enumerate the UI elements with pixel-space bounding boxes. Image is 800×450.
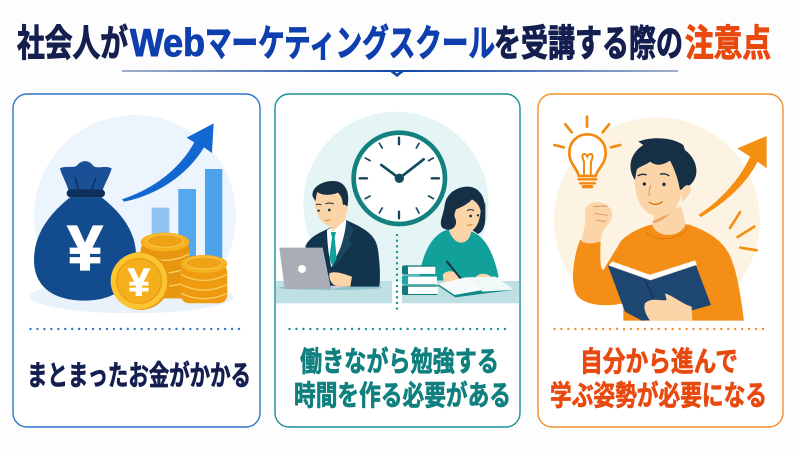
label [294, 345, 511, 411]
title [17, 22, 771, 65]
illustration: money bag, coins and rising chart [30, 115, 236, 317]
dotted divider [554, 328, 764, 330]
title: を受講する際の [494, 23, 683, 64]
label [550, 346, 767, 411]
dotted divider [30, 328, 241, 330]
illustration: clock, worker and student [276, 112, 519, 314]
panel: self-motivation [538, 94, 783, 427]
person: student with notebook [402, 187, 514, 297]
person: learner [573, 138, 744, 321]
title: 注意点 [685, 23, 771, 64]
vertical dotted divider [393, 235, 400, 314]
label: まとまったお金がかかる [27, 359, 251, 391]
label: 働きながら勉強する [300, 345, 499, 377]
clock [354, 133, 445, 224]
yen coin [111, 252, 170, 310]
illustration: learner with book and light bulb [554, 117, 767, 323]
label: 自分から進んで [580, 346, 738, 377]
icon: rising arrow [698, 136, 767, 217]
label: 時間を作る必要がある [294, 379, 511, 411]
dotted divider [290, 328, 505, 330]
icon: light bulb [554, 117, 620, 187]
title underline with chevron [122, 70, 678, 77]
title: マーケティングスクール [205, 23, 495, 64]
person: worker with laptop [279, 181, 382, 290]
yen coin: ¥ [128, 261, 150, 305]
panel: time [275, 94, 520, 427]
title: Web [130, 22, 205, 65]
title: 社会人が [17, 23, 128, 64]
gold coin stack [141, 233, 227, 303]
illustration: money bag, coins and rising chart: ¥ [68, 214, 103, 284]
panel: cost [13, 94, 260, 427]
